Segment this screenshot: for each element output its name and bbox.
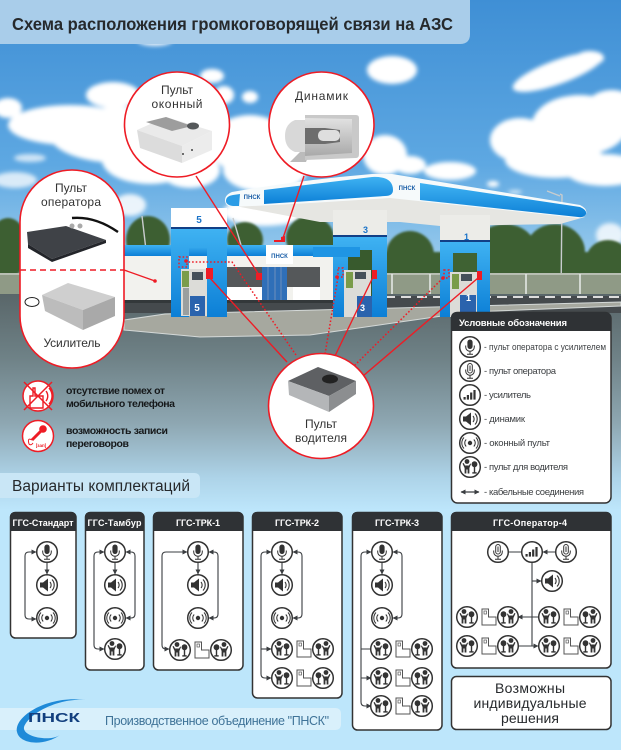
legend panel	[451, 312, 611, 503]
pump column 3: 3	[363, 225, 368, 235]
legend panel: - пульт для водителя	[484, 462, 568, 473]
card: ГГС-Стандарт: ГГС-Стандарт	[12, 518, 74, 528]
title band	[0, 0, 470, 44]
card: ГГС-ТРК-1	[153, 512, 243, 670]
feature: call recording: возможность записи	[66, 425, 168, 437]
building logo	[266, 245, 293, 264]
pump column 1	[440, 215, 490, 317]
feature: call recording: [зап]	[36, 443, 47, 448]
circle: window console: оконный	[152, 97, 202, 111]
building logo: ПНСК	[271, 254, 288, 260]
lamp posts	[142, 191, 562, 298]
card: ГГС-ТРК-2	[252, 512, 342, 698]
card: ГГС-Тамбур	[85, 512, 144, 670]
forecourt platform	[124, 302, 621, 337]
circle: driver console: водителя	[295, 431, 347, 445]
pump column 1: 1	[464, 232, 469, 242]
ground	[0, 294, 621, 510]
footer band: Производственное объединение "ПНСК"	[105, 714, 329, 728]
feature: no phone interference: мобильного телефона	[66, 398, 175, 410]
pump column 5	[171, 208, 227, 317]
pump column 5: 5	[194, 303, 200, 314]
card: ГГС-ТРК-3: ГГС-ТРК-3	[375, 518, 419, 528]
circle: window console: Пульт	[161, 83, 194, 97]
canopy	[225, 174, 586, 226]
legend panel: - усилитель	[484, 390, 531, 401]
pill: operator console and amplifier: Пульт	[55, 181, 88, 195]
card: ГГС-Стандарт	[10, 512, 76, 638]
footer band	[0, 708, 341, 730]
fence	[0, 273, 621, 297]
circle: driver console	[268, 354, 374, 458]
card: ГГС-ТРК-1: ГГС-ТРК-1	[176, 518, 220, 528]
road behind forecourt	[124, 296, 621, 313]
logo ПНСК	[17, 699, 85, 743]
pump column 3: 3	[360, 303, 365, 313]
legend panel: - динамик	[484, 414, 526, 425]
circle: speaker: Динамик	[295, 89, 349, 103]
feature: call recording: переговоров	[66, 438, 130, 450]
card: individual solutions: индивидуальные	[474, 695, 587, 711]
icon: amplifier	[25, 283, 115, 330]
card: ГГС-ТРК-2: ГГС-ТРК-2	[275, 518, 319, 528]
feature: no phone interference	[23, 381, 175, 411]
background sky	[0, 0, 621, 300]
card: individual solutions: Возможны	[495, 680, 565, 696]
legend panel: - кабельные соединения	[484, 487, 584, 498]
circle: speaker	[269, 72, 374, 177]
card: ГГС-Оператор-4	[451, 512, 611, 668]
pill: operator console and amplifier: Усилитель	[44, 336, 100, 350]
card: individual solutions	[452, 676, 611, 730]
heading band: variants: Варианты комплектаций	[12, 478, 190, 495]
legend panel: Условные обозначения	[459, 318, 567, 329]
card: individual solutions: решения	[501, 710, 559, 726]
circle: driver console: Пульт	[305, 417, 338, 431]
legend panel: - пульт оператора	[484, 366, 557, 377]
clouds	[0, 34, 621, 247]
title: Схема расположения громкоговорящей связи на АЗС	[12, 14, 453, 34]
pill: operator console and amplifier: оператора	[41, 195, 101, 209]
feature: call recording	[22, 420, 168, 452]
pump column 1: 1	[466, 293, 471, 303]
station building	[124, 245, 364, 303]
canopy logos	[244, 186, 416, 201]
red markers	[153, 236, 482, 283]
pump column 3	[313, 210, 387, 317]
trees	[0, 216, 621, 281]
card: ГГС-ТРК-3	[352, 512, 442, 730]
circle: window console	[124, 72, 230, 177]
logo ПНСК: ПНСК	[28, 711, 81, 725]
feature: no phone interference: отсутствие помех от	[66, 385, 165, 397]
canopy logos: ПНСК	[244, 195, 261, 201]
canopy logos: ПНСК	[399, 186, 416, 192]
red connection lines	[124, 176, 478, 376]
heading band: variants	[0, 473, 200, 498]
card: ГГС-Оператор-4: ГГС-Оператор-4	[493, 518, 567, 528]
icon: operator console	[27, 218, 118, 262]
card: ГГС-Тамбур: ГГС-Тамбур	[88, 518, 142, 528]
legend panel: - пульт оператора с усилителем	[484, 342, 606, 353]
pump column 5: 5	[196, 215, 202, 226]
pill: operator console and amplifier	[20, 170, 124, 368]
legend panel: - оконный пульт	[484, 438, 551, 449]
